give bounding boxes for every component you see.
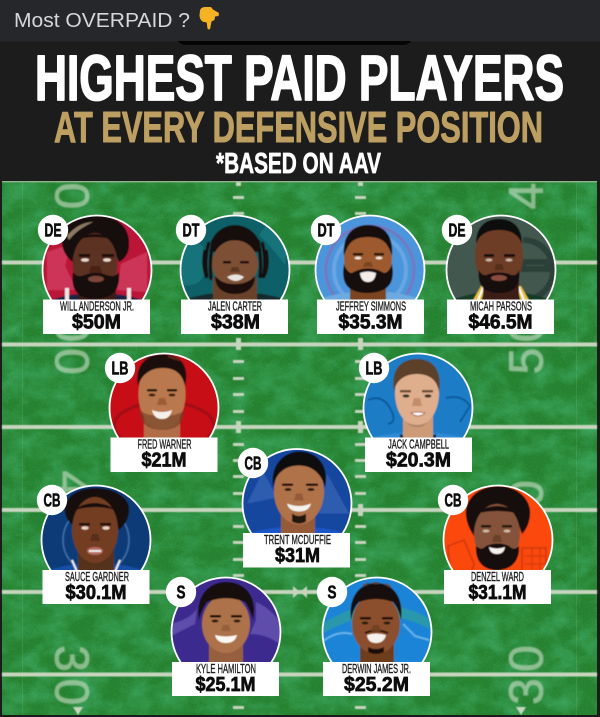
name and salary plate [243,533,350,568]
football field: 5 [500,348,554,374]
post caption: Most OVERPAID ? [14,10,190,32]
player: Micah Parsons [442,215,556,334]
portrait [170,576,282,662]
icon: pointing down hand [200,7,219,30]
player: Will Anderson Jr. [38,215,152,334]
position badge: DE [44,220,62,240]
portrait [446,214,556,300]
player: Jeffrey Simmons [311,215,425,334]
position badge: CB [44,490,60,510]
name and salary plate: JEFFREY SIMMONS [336,300,406,314]
football field [2,181,597,715]
portrait [40,484,152,570]
name and salary plate: $46.5M [468,312,532,334]
name and salary plate [317,300,424,334]
player: Sauce Gardner [37,485,151,604]
name and salary plate [365,438,472,472]
football field: 4 [500,183,554,209]
name and salary plate: TRENT MCDUFFIE [264,533,331,547]
name and salary plate: DENZEL WARD [471,570,524,584]
player: Fred Warner [105,353,219,472]
name and salary plate: $30.1M [66,582,126,604]
name and salary plate: $21M [142,450,186,472]
position badge: CB [444,490,462,510]
football field: 0 [44,316,98,342]
name and salary plate [42,570,150,604]
name and salary plate [323,662,430,696]
football field: 3 [500,678,554,705]
position badge: DT [318,220,334,240]
position badge: DT [182,220,200,240]
footnote: *BASED ON AAV [216,148,381,180]
portrait [322,576,432,662]
name and salary plate: $31M [275,545,320,567]
portrait [442,484,554,570]
position badge: LB [366,358,382,378]
player: Denzel Ward [438,485,553,604]
player: Trent McDuffie [238,448,352,568]
name and salary plate [181,300,288,334]
name and salary plate: JALEN CARTER [208,300,262,314]
football field: 0 [500,645,554,672]
portrait [108,352,220,438]
name and salary plate: $31.1M [468,582,526,604]
position badge: S [176,582,186,602]
header bar [0,0,600,45]
name and salary plate [444,570,551,604]
football field: 4 [44,471,98,497]
name and salary plate: $38M [211,312,260,334]
player: Jalen Carter [176,215,290,334]
name and salary plate: MICAH PARSONS [470,300,532,314]
name and salary plate: $25.1M [196,674,256,696]
football field: 0 [44,348,98,375]
name and salary plate: $35.3M [338,312,402,334]
player: Jack Campbell [359,353,473,472]
portrait [314,214,426,300]
dark title band [0,41,600,183]
name and salary plate: DERWIN JAMES JR. [342,662,411,676]
position badge: CB [244,453,262,473]
portrait [180,214,290,300]
name and salary plate: JACK CAMPBELL [388,438,449,452]
name and salary plate: SAUCE GARDNER [65,570,129,584]
name and salary plate: WILL ANDERSON JR. [60,300,134,314]
portrait [42,214,152,300]
position badge: LB [112,358,128,378]
name and salary plate: KYLE HAMILTON [196,662,256,676]
football field: 0 [44,679,98,705]
portrait [242,448,352,533]
name and salary plate: $20.3M [386,450,451,472]
name and salary plate [447,300,554,334]
name and salary plate [172,662,279,696]
football field: 3 [44,645,98,672]
football field: 0 [500,480,554,507]
name and salary plate [43,300,150,334]
player: Derwin James Jr. [317,577,432,696]
football field: 0 [500,316,554,342]
name and salary plate: FRED WARNER [138,438,192,452]
position badge: DE [448,220,466,240]
name and salary plate: $25.2M [344,674,409,696]
position badge: S [328,582,336,602]
player: Kyle Hamilton [166,577,281,696]
portrait [362,352,474,438]
name and salary plate: $50M [72,312,121,334]
name and salary plate [110,438,218,472]
football field: 0 [44,183,98,209]
